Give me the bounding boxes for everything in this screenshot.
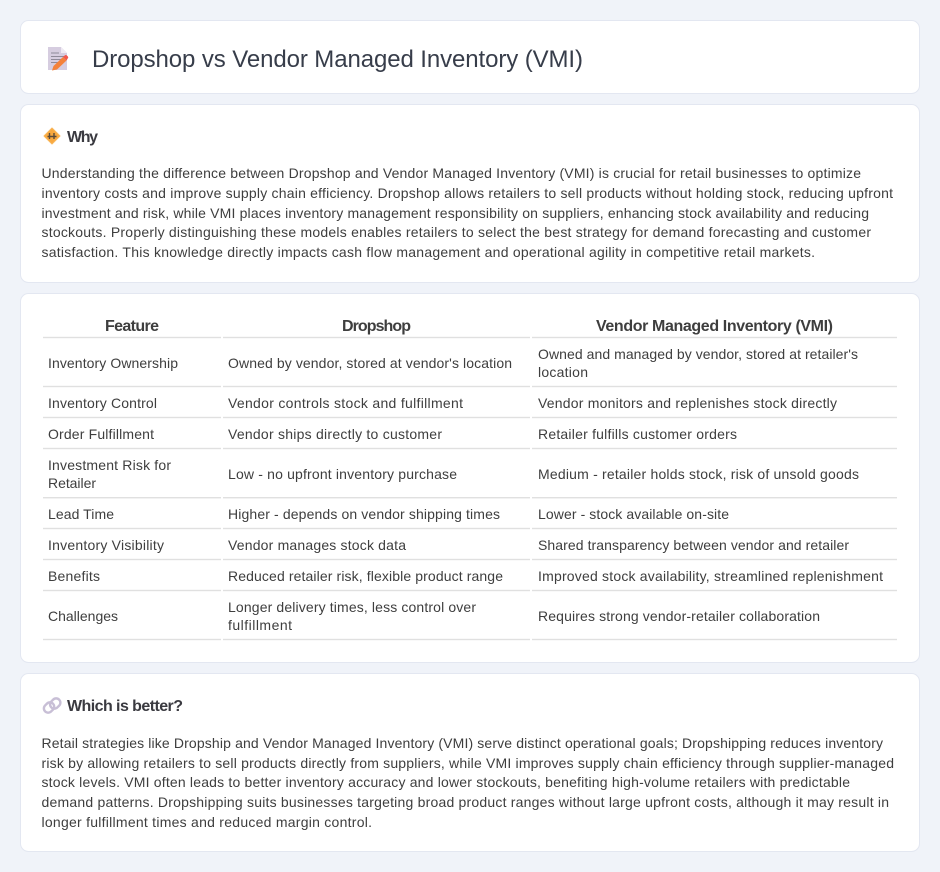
text block: which is better paragraph: longer fulfillment times and reduced margin control. [42,814,372,830]
row: inventory control [48,395,837,411]
heading: why: Why [67,129,98,146]
table header [105,318,833,335]
icon: warning diamond [44,128,60,144]
row: lead time [48,506,729,522]
text block: which is better paragraph: risk by allowing retailers to sell products directly from suppliers, while VMI improves supply chain efficiency through supplier-managed [42,755,894,771]
row: challenges: Longer delivery times, less control over [228,599,476,615]
row: benefits [48,568,883,584]
row: investment risk: Low - no upfront inventory purchase [228,466,457,482]
row: inventory visibility: Inventory Visibility [48,537,164,553]
row: benefits: Improved stock availability, streamlined replenishment [538,568,883,584]
row: investment risk: Retailer [48,475,96,491]
row: lead time: Lower - stock available on-site [538,506,729,522]
row: challenges: Challenges [48,608,118,624]
text block: why paragraph: inventory costs and improve supply chain efficiency. Dropshop allows retailers to sell products without holding stock, reducing upfront [42,185,893,201]
row: inventory control: Vendor monitors and replenishes stock directly [538,395,837,411]
text block: why paragraph: Understanding the difference between Dropshop and Vendor Managed Inventory (VMI) is crucial for retail businesses to optimize [42,165,861,181]
row: inventory ownership: Inventory Ownership [48,355,178,371]
row: lead time: Higher - depends on vendor shipping times [228,506,500,522]
text block: which is better paragraph: demand patterns. Dropshipping suits businesses targeting broad product ranges without large upfront costs, although it may result in [42,794,889,810]
row: inventory control: Inventory Control [48,395,157,411]
row: inventory visibility [48,537,849,553]
title: Dropshop vs Vendor Managed Inventory (VMI) [92,46,583,73]
row: benefits: Benefits [48,568,100,584]
panel: title header [20,20,920,94]
row: investment risk: Medium - retailer holds stock, risk of unsold goods [538,466,859,482]
row: inventory control: Vendor controls stock and fulfillment [228,395,463,411]
text block: which is better paragraph: stock levels. VMI often leads to better inventory accuracy and lower stockouts, benefiting high-volume retailers with predictable [42,774,850,790]
table header: Vendor Managed Inventory (VMI) [596,318,833,335]
row: order fulfillment: Order Fulfillment [48,426,154,442]
panel: which is better [20,674,920,852]
text block: which is better paragraph [42,735,894,830]
row: challenges: fulfillment [228,617,292,633]
row: investment risk: Investment Risk for [48,457,171,473]
row: inventory visibility: Vendor manages stock data [228,537,406,553]
table header: Dropshop [342,318,411,335]
panel: why [20,104,920,282]
row: inventory ownership: Owned and managed by vendor, stored at retailer's [538,346,858,362]
text block: why paragraph: satisfaction. This knowledge directly impacts cash flow management and operational agility in competitive retail markets. [42,244,815,260]
row: inventory ownership: Owned by vendor, stored at vendor's location [228,355,512,371]
text block: which is better paragraph: Retail strategies like Dropship and Vendor Managed Inventory (VMI) serve distinct operational goals; Dropshipping reduces inventory [42,735,883,751]
row: challenges [48,599,820,633]
row: lead time: Lead Time [48,506,114,522]
icon: memo with pencil [48,47,68,70]
text block: why paragraph: stockouts. Properly distinguishing these models enables retailers to select the best strategy for demand forecasting and customer [42,224,871,240]
row: order fulfillment: Vendor ships directly to customer [228,426,442,442]
row: investment risk [48,457,859,491]
row: challenges: Requires strong vendor-retailer collaboration [538,608,820,624]
icon: link [42,697,62,714]
table header: Feature [105,318,159,335]
row: benefits: Reduced retailer risk, flexible product range [228,568,503,584]
row: order fulfillment [48,426,737,442]
text block: why paragraph: investment and risk, while VMI places inventory management responsibility on suppliers, enhancing stock availability and reducing [42,205,869,221]
row: order fulfillment: Retailer fulfills customer orders [538,426,737,442]
heading: which is better: Which is better? [67,698,183,715]
panel: comparison table [20,294,920,662]
row: inventory ownership: location [538,364,588,380]
row: inventory ownership [48,346,858,380]
row: inventory visibility: Shared transparency between vendor and retailer [538,537,849,553]
text block: why paragraph [42,165,893,260]
